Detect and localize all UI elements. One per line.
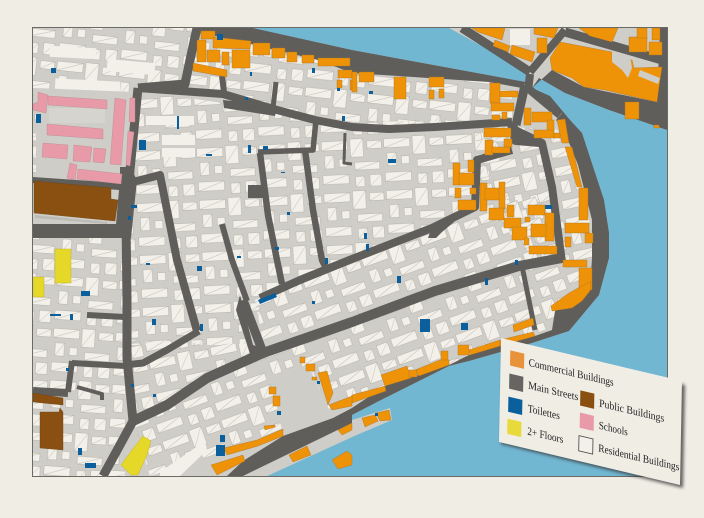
legend shadow: [501, 342, 685, 488]
residential buildings legend item: [579, 436, 679, 475]
toilettes legend item: [508, 397, 560, 424]
plaza: [273, 366, 328, 428]
commercial buildings legend item: [510, 350, 614, 390]
pale strip under public building: [35, 215, 107, 224]
school court white strip: [49, 108, 105, 123]
water: lagoon: [267, 78, 667, 476]
school courtyard: [36, 88, 135, 180]
map panel: [33, 28, 667, 476]
2+ floors legend item: 2+ Floors: [527, 426, 563, 446]
main streets legend item: Main Streets: [528, 380, 578, 403]
public buildings: [33, 181, 118, 450]
main streets legend item: [509, 373, 578, 405]
schools legend item: [580, 413, 628, 439]
main streets: [33, 28, 667, 476]
toilettes legend item: Toilettes: [528, 403, 560, 422]
public buildings legend item: [580, 390, 664, 425]
courtyards in commercial block: [612, 52, 660, 84]
residential building blocks: [33, 28, 600, 476]
commercial buildings: [193, 28, 662, 475]
residential buildings legend item: Residential Buildings: [598, 442, 679, 474]
pier: [267, 408, 392, 476]
water: north canal: [253, 28, 529, 82]
land base: [33, 28, 667, 476]
2+ floors legend item: [507, 419, 563, 447]
map frame: [32, 28, 668, 476]
schools: [33, 92, 135, 184]
legend card: [499, 338, 682, 485]
schools legend item: Schools: [599, 420, 628, 439]
public buildings legend item: Public Buildings: [599, 398, 664, 425]
toilettes: [36, 34, 552, 468]
commercial buildings legend item: Commercial Buildings: [529, 357, 614, 389]
2+ floors: [33, 249, 151, 475]
